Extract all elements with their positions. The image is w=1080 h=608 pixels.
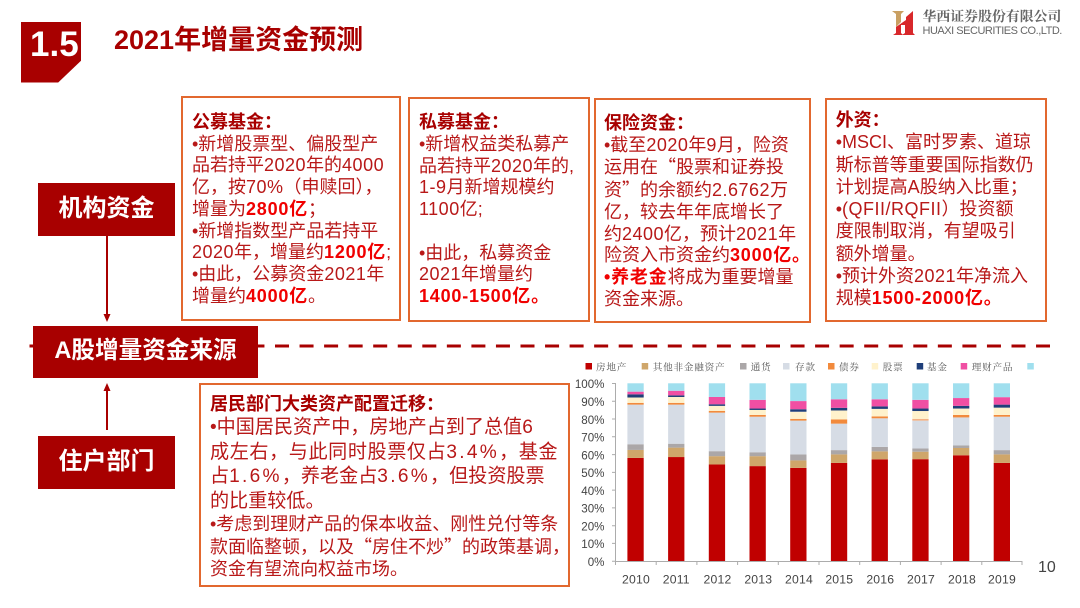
y axis labels: 50% [581, 467, 604, 480]
chart legend [586, 361, 1034, 373]
chart legend: 理财产品 [972, 361, 1013, 373]
household allocation facts: 的比重较低。 [210, 491, 325, 512]
y axis labels: 20% [581, 520, 604, 533]
icon: company logo mark [892, 11, 915, 35]
household allocation outlook: 款面临整顿，以及“房住不炒”的政策基调， [210, 533, 570, 559]
panel: private funds: •新增权益类私募产 [419, 134, 569, 154]
x axis labels: 2019 [988, 573, 1016, 587]
label: A-share incremental fund sources [33, 326, 258, 378]
panel: insurance funds: 保险资金： [604, 113, 694, 133]
panel: private funds: 2021年增量约 [419, 264, 533, 284]
panel: public funds: 2020年，增量约1200亿; [192, 242, 391, 262]
x axis labels: 2010 [622, 573, 650, 587]
panel: private funds: 品若持平2020年的, [419, 156, 574, 176]
x axis labels: 2014 [785, 573, 813, 587]
y axis labels: 90% [581, 396, 604, 409]
panel: private funds: 1-9月新增规模约 [419, 177, 555, 197]
y axis labels: 80% [581, 414, 604, 427]
y axis labels: 30% [581, 502, 604, 516]
x axis labels: 2013 [744, 573, 772, 587]
panel: insurance funds: 约2400亿，预计2021年 [604, 224, 796, 244]
logo [892, 9, 1062, 37]
panel: insurance funds: 资金来源。 [604, 289, 694, 309]
panel: public funds: 增量为2800亿； [192, 199, 326, 219]
y axis labels: 60% [581, 449, 604, 462]
y axis labels: 10% [581, 538, 604, 551]
household allocation facts: •中国居民资产中，房地产占到了总值6 [210, 417, 534, 438]
chart legend: 股票 [883, 362, 903, 373]
panel heading: 居民部门大类资产配置迁移： [210, 394, 444, 414]
company English name: HUAXI SECURITIES CO.,LTD. [922, 25, 1062, 37]
chart legend: 债券 [839, 361, 860, 373]
x axis labels [622, 573, 1016, 587]
x axis labels: 2018 [948, 573, 976, 587]
panel: public funds: 品若持平2020年的4000 [192, 155, 384, 175]
chart legend: 房地产 [596, 361, 627, 373]
household allocation outlook: •考虑到理财产品的保本收益、刚性兑付等条 [210, 514, 558, 534]
panel: public funds: •由此，公募资金2021年 [192, 264, 384, 284]
chart legend: 其他非金融资产 [653, 361, 725, 373]
x axis labels: 2015 [825, 573, 853, 587]
y axis labels: 70% [581, 432, 604, 444]
x axis labels: 2012 [704, 573, 731, 587]
y axis labels [575, 378, 604, 569]
chart legend: 存款 [795, 361, 816, 373]
panel: foreign capital: 计划提高A股纳入比重； [836, 177, 1028, 197]
panel: public funds [181, 96, 401, 321]
panel: foreign capital [825, 98, 1047, 322]
bars [627, 383, 1010, 561]
page number: 10 [1038, 559, 1056, 576]
chart legend: 通货 [751, 361, 772, 373]
section number badge [21, 22, 81, 82]
panel: insurance funds: •截至2020年9月，险资 [604, 135, 789, 155]
label: institutional funds: 机构资金 [58, 195, 154, 222]
panel: insurance funds: 亿，较去年年底增长了 [604, 202, 784, 222]
panel: foreign capital: •(QFII/RQFII）投资额 [836, 199, 1014, 219]
panel: foreign capital: •预计外资2021年净流入 [836, 266, 1028, 286]
y axis labels: 100% [575, 378, 604, 391]
panel: foreign capital: 斯标普等重要国际指数仍 [836, 155, 1034, 175]
panel: insurance funds: 资”的余额约2.6762万 [604, 176, 788, 202]
panel: insurance funds: 险资入市资金约3000亿。 [604, 245, 811, 265]
panel: insurance funds: 运用在“股票和证券投 [604, 153, 784, 179]
panel: foreign capital: 外资： [836, 110, 890, 130]
panel: insurance funds: •养老金将成为重要增量 [604, 267, 794, 287]
panel: public funds: 公募基金： [192, 112, 282, 132]
panel: foreign capital: •MSCI、富时罗素、道琼 [836, 132, 1031, 152]
arrow: institutions to A-share [104, 236, 110, 322]
panel: private funds: 私募基金： [419, 112, 509, 132]
panel: public funds: •新增指数型产品若持平 [192, 221, 378, 241]
panel: public funds: 亿，按70%（申赎回）， [192, 177, 383, 197]
household allocation outlook: 资金有望流向权益市场。 [210, 559, 408, 579]
panel: private funds: 1100亿; [419, 199, 483, 219]
panel: private funds: 1400-1500亿。 [419, 286, 550, 306]
panel: private funds: •由此，私募资金 [419, 243, 551, 263]
label: A-share incremental fund sources: A股增量资金来源 [54, 338, 237, 364]
panel: insurance funds [594, 98, 811, 323]
household allocation facts: 成左右，与此同时股票仅占3.4%，基金 [210, 442, 558, 463]
company name: 华西证券股份有限公司 [922, 10, 1061, 24]
x axis labels: 2016 [866, 573, 894, 587]
chart axes [612, 384, 1022, 565]
household allocation outlook [210, 514, 570, 579]
household allocation facts: 占1.6%，养老金占3.6%，但投资股票 [210, 466, 545, 487]
household allocation facts [210, 416, 558, 512]
panel: public funds: •新增股票型、偏股型产 [192, 134, 378, 154]
x axis labels: 2011 [663, 573, 690, 587]
y axis labels: 0% [588, 556, 604, 569]
section number badge: 1.5 [30, 25, 79, 64]
x axis labels: 2017 [907, 573, 935, 587]
label: households [38, 436, 175, 489]
panel: foreign capital: 度限制取消，有望吸引 [836, 221, 1016, 241]
panel: household asset allocation shift [199, 383, 570, 587]
panel: public funds: 增量约4000亿。 [192, 286, 326, 306]
panel: private funds [408, 97, 590, 322]
panel: foreign capital: 额外增量。 [836, 244, 926, 264]
chart legend: 基金 [927, 361, 948, 373]
panel: foreign capital: 规模1500-2000亿。 [836, 288, 1003, 308]
label: institutional funds [38, 183, 175, 236]
arrow: households to A-share [104, 383, 110, 430]
title: 2021年增量资金预测 [114, 25, 363, 55]
label: households: 住户部门 [58, 448, 154, 475]
y axis labels: 40% [581, 485, 604, 498]
